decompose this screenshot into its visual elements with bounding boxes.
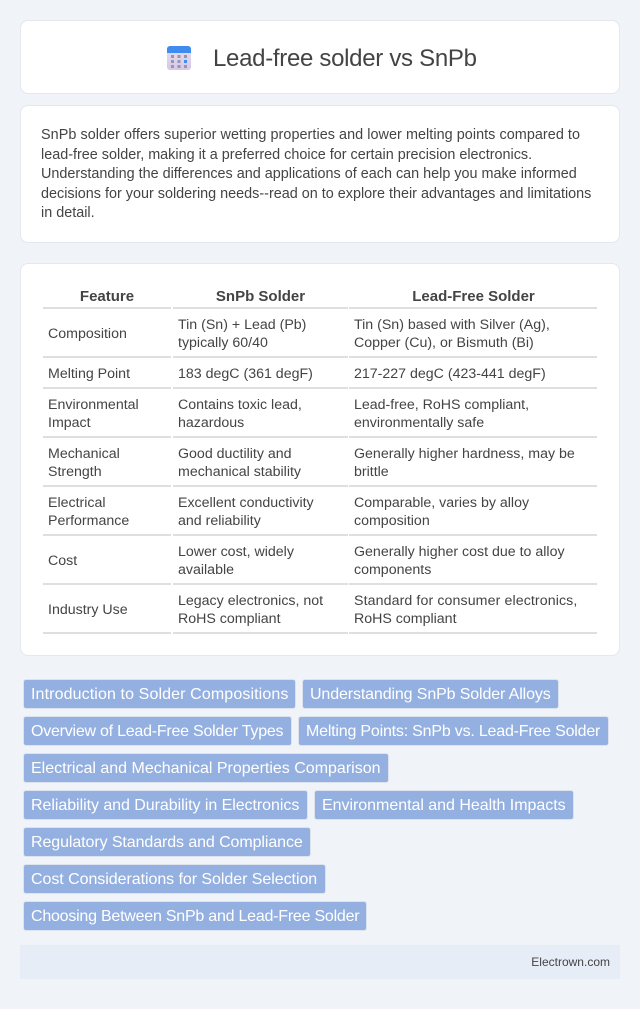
tag: Regulatory Standards and Compliance	[31, 834, 303, 851]
row: electrical performance: Electrical	[48, 495, 106, 511]
row: electrical performance: Performance	[48, 513, 129, 529]
comparison table panel: Generally higher cost due to alloy	[354, 544, 565, 560]
row: cost: Cost	[48, 553, 77, 569]
tag: Cost Considerations for Solder Selection	[31, 871, 317, 888]
comparison table panel: available	[178, 562, 234, 578]
comparison table panel: Lower cost, widely	[178, 544, 294, 560]
comparison table panel: and reliability	[178, 513, 261, 529]
row: environmental impact: Environmental	[48, 397, 139, 413]
tag: Understanding SnPb Solder Alloys	[310, 686, 551, 703]
row: composition: Composition	[48, 326, 127, 342]
icon: calendar	[167, 46, 191, 70]
comparison table panel: 217-227 degC (423-441 degF)	[354, 366, 546, 382]
tag: Introduction to Solder Compositions	[31, 686, 288, 703]
title: Lead-free solder vs SnPb	[213, 45, 477, 72]
tag: Environmental and Health Impacts	[322, 797, 566, 814]
comparison table panel	[20, 263, 620, 656]
tag: Melting Points: SnPb vs. Lead-Free Solder	[306, 723, 600, 740]
comparison table panel: Tin (Sn) + Lead (Pb)	[178, 317, 306, 333]
row: electrical performance	[48, 495, 129, 529]
intro text: SnPb solder offers superior wetting properties and lower melting points compared to	[41, 127, 580, 143]
tag	[298, 716, 609, 746]
intro text: lead-free solder, making it a preferred choice for certain precision electronics.	[41, 146, 532, 162]
intro card	[20, 105, 620, 243]
comparison table panel: composition	[354, 513, 430, 529]
comparison table panel: hazardous	[178, 415, 244, 431]
intro text: Understanding the differences and applications of each can help you make informed	[41, 166, 577, 182]
row: mechanical strength: Mechanical	[48, 446, 120, 462]
comparison table panel: Lead-free, RoHS compliant,	[354, 397, 529, 413]
tag: Electrical and Mechanical Properties Comparison	[31, 760, 380, 777]
tag: Reliability and Durability in Electronics	[31, 797, 299, 814]
comparison table panel: RoHS compliant	[354, 611, 457, 627]
comparison table panel: Excellent conductivity	[178, 495, 314, 511]
comparison table panel: environmentally safe	[354, 415, 484, 431]
tag	[23, 827, 311, 857]
intro text	[41, 127, 591, 221]
intro text: in detail.	[41, 205, 95, 221]
comparison table panel: Generally higher hardness, may be	[354, 446, 575, 462]
comparison table panel: Tin (Sn) based with Silver (Ag),	[354, 317, 550, 333]
comparison table panel: brittle	[354, 464, 389, 480]
footer credit: Electrown.com	[531, 955, 610, 969]
row: melting point: Melting Point	[48, 366, 130, 382]
comparison table panel: Comparable, varies by alloy	[354, 495, 529, 511]
comparison table panel: 183 degC (361 degF)	[178, 366, 313, 382]
table header	[43, 288, 597, 309]
tag	[23, 790, 308, 820]
tag list	[23, 679, 609, 931]
comparison table panel: components	[354, 562, 431, 578]
table header: Lead-Free Solder	[412, 288, 535, 305]
tag	[302, 679, 559, 709]
row: environmental impact	[48, 397, 139, 431]
tag	[23, 864, 326, 894]
tag	[23, 716, 292, 746]
header card	[20, 20, 620, 94]
comparison table panel: Standard for consumer electronics,	[354, 593, 577, 609]
comparison table panel: typically 60/40	[178, 335, 268, 351]
row: mechanical strength: Strength	[48, 464, 102, 480]
row: environmental impact: Impact	[48, 415, 91, 431]
row: industry use: Industry Use	[48, 602, 128, 618]
comparison table panel: Copper (Cu), or Bismuth (Bi)	[354, 335, 534, 351]
comparison table panel: Good ductility and	[178, 446, 292, 462]
comparison table panel: Legacy electronics, not	[178, 593, 323, 609]
tag: Choosing Between SnPb and Lead-Free Solder	[31, 908, 359, 925]
row: mechanical strength	[48, 446, 120, 480]
table header: SnPb Solder	[216, 288, 305, 305]
comparison table panel: Contains toxic lead,	[178, 397, 302, 413]
tag: Overview of Lead-Free Solder Types	[31, 723, 283, 740]
tag	[23, 679, 296, 709]
comparison table panel: mechanical stability	[178, 464, 301, 480]
tag	[23, 753, 389, 783]
footer	[20, 945, 620, 979]
comparison table panel: RoHS compliant	[178, 611, 281, 627]
intro text: decisions for your soldering needs--read on to explore their advantages and limitations	[41, 186, 591, 202]
tag	[314, 790, 574, 820]
table header: Feature	[80, 288, 134, 305]
tag	[23, 901, 367, 931]
